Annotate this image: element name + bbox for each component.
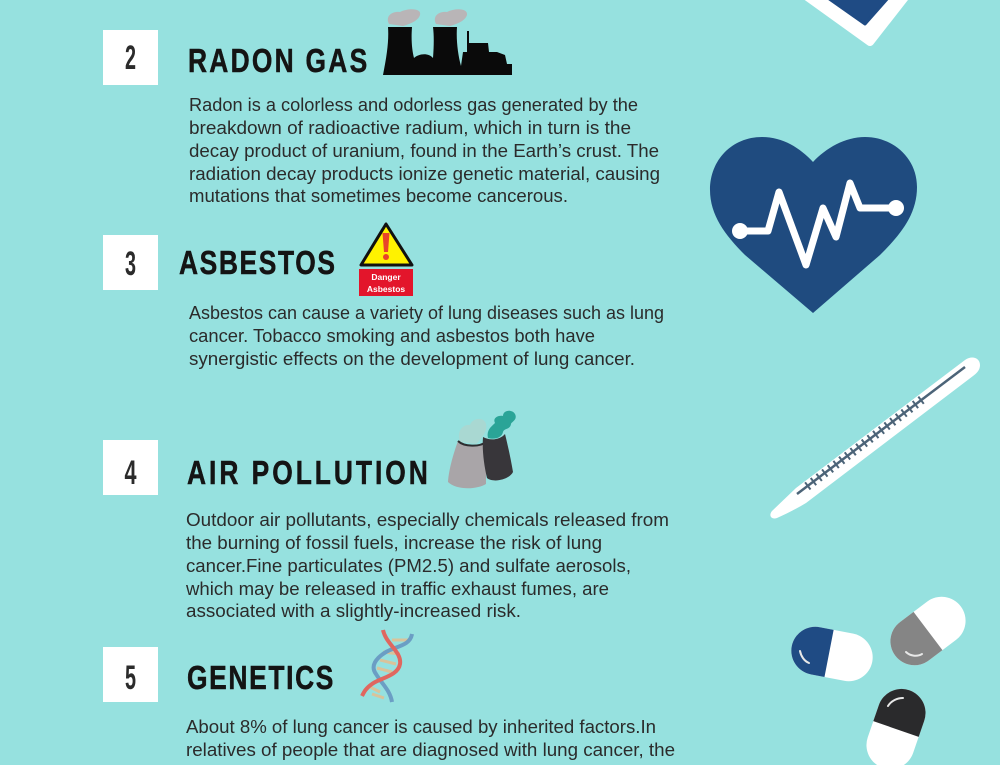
panel: air pollution <box>103 411 669 621</box>
icon: badge at top right <box>806 0 906 42</box>
number badge 3: 3 <box>125 245 136 283</box>
icon: gray pill <box>881 587 975 675</box>
number badge 5: 5 <box>125 659 136 697</box>
text: air pollution description: cancer.Fine particulates (PM2.5) and sulfate aerosols, <box>186 556 631 576</box>
panel: genetics <box>103 630 675 765</box>
panel: radon gas <box>103 9 660 206</box>
number badge 2 <box>103 30 158 85</box>
text: air pollution description: associated with a slightly-increased risk. <box>186 601 521 621</box>
icon: power plant <box>383 9 512 75</box>
number badge 2: 2 <box>125 39 136 77</box>
heading: radon gas: RADON GAS <box>188 43 367 80</box>
icon: black pill <box>860 682 932 765</box>
text: asbestos description <box>189 303 664 369</box>
icon: blue pill <box>787 623 877 685</box>
number badge 3 <box>103 235 158 290</box>
heading: genetics: GENETICS <box>187 660 333 697</box>
text: asbestos description: cancer. Tobacco smoking and asbestos both have <box>189 326 595 346</box>
panel: asbestos <box>103 224 664 369</box>
heading: air pollution: AIR POLLUTION <box>187 455 428 492</box>
text: asbestos description: Asbestos can cause a variety of lung diseases such as lung <box>189 303 664 323</box>
text: air pollution description: Outdoor air pollutants, especially chemicals released from <box>186 510 669 530</box>
text: radon description: breakdown of radioactive radium, which in turn is the <box>189 118 631 138</box>
icon: smokestacks <box>448 411 516 488</box>
icon: danger asbestos sign <box>359 224 413 296</box>
icon: danger asbestos sign: Asbestos <box>367 284 405 294</box>
icon: dna helix <box>362 630 412 702</box>
text: radon description: mutations that sometimes become cancerous. <box>189 186 568 206</box>
number badge 4: 4 <box>124 454 137 492</box>
text: air pollution description: the burning of fossil fuels, increase the risk of lung <box>186 533 602 553</box>
text: radon description <box>189 95 660 206</box>
text: genetics description: About 8% of lung cancer is caused by inherited factors.In <box>186 717 656 737</box>
text: radon description: decay product of uranium, found in the Earth’s crust. The <box>189 141 659 161</box>
number badge 4 <box>103 440 158 495</box>
text: genetics description: relatives of people that are diagnosed with lung cancer, the <box>186 740 675 760</box>
heading: asbestos: ASBESTOS <box>179 245 335 282</box>
text: air pollution description <box>185 510 669 621</box>
text: radon description: radiation decay products ionize genetic material, causing <box>189 164 660 184</box>
text: air pollution description: which may be released in traffic exhaust fumes, are <box>185 579 609 599</box>
number badge 5 <box>103 647 158 702</box>
icon: heart with pulse <box>710 137 917 313</box>
text: asbestos description: synergistic effects on the development of lung cancer. <box>189 349 635 369</box>
icon: danger asbestos sign: Danger <box>371 272 401 282</box>
text: genetics description <box>186 717 675 765</box>
text: radon description: Radon is a colorless and odorless gas generated by the <box>189 95 638 115</box>
icon: thermometer <box>770 358 980 519</box>
